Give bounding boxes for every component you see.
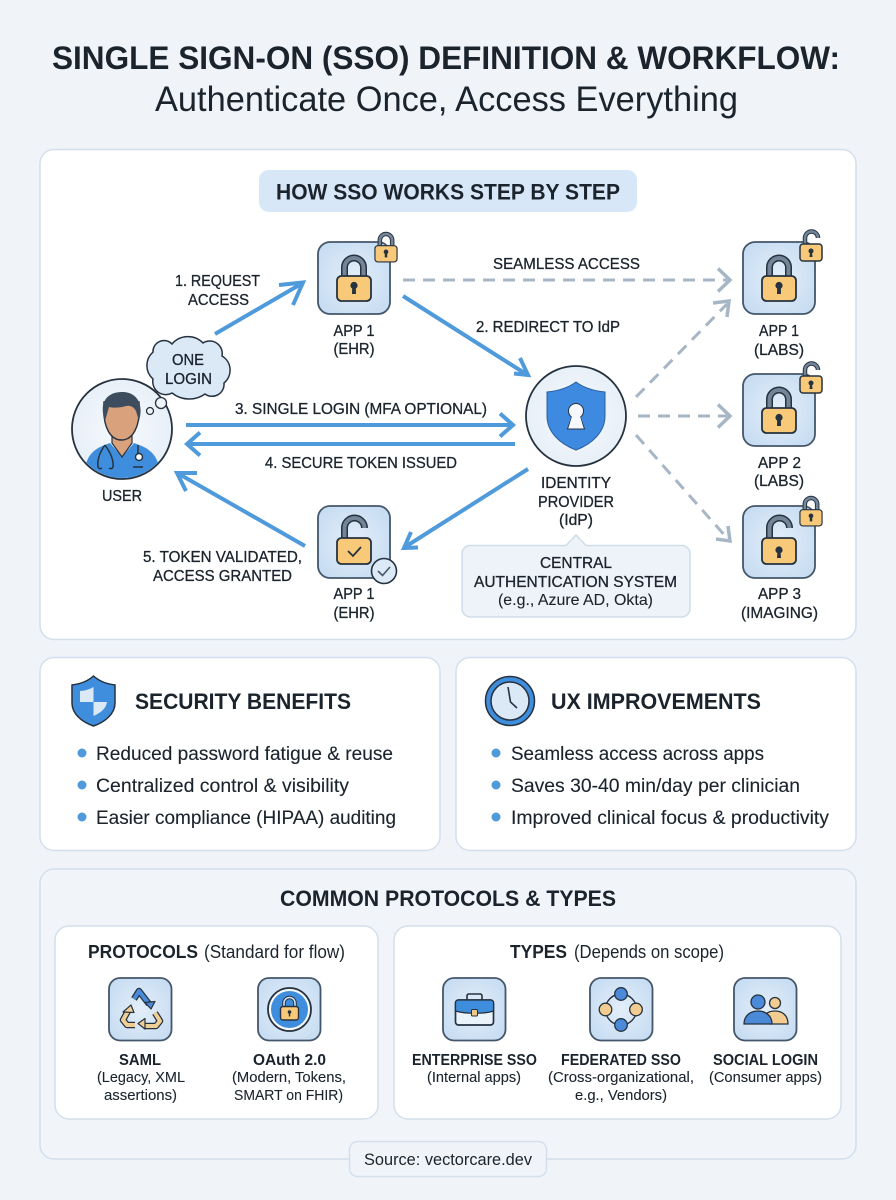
- tile: app 3 imaging: APP 3: [758, 586, 801, 603]
- tile: app 2 labs: (LABS): [754, 473, 804, 490]
- thought cloud: one login: [146, 337, 230, 414]
- thought cloud: one login: ONE: [172, 352, 204, 369]
- icon: clock: [486, 676, 534, 726]
- arrow: step 2 redirect: [403, 296, 528, 375]
- thought cloud: one login: LOGIN: [165, 371, 212, 388]
- label: user: USER: [102, 488, 142, 505]
- label: step 1: 1. REQUEST: [175, 273, 260, 290]
- tile: app 3 imaging: (IMAGING): [741, 605, 818, 622]
- label: identity provider: IDENTITY: [541, 475, 611, 492]
- tile: app 1 EHR (locked): (EHR): [334, 341, 374, 358]
- label: step 1: [175, 273, 260, 309]
- icon: briefcase: [443, 978, 506, 1040]
- icon: social login people: [734, 978, 796, 1040]
- tile: app 1 EHR (locked): [318, 234, 397, 358]
- tile: app 2 labs: [743, 364, 822, 490]
- label: OAuth 2.0: SMART on FHIR): [234, 1087, 343, 1104]
- tile: app 3 imaging: [741, 498, 822, 622]
- label: social login: [709, 1052, 822, 1086]
- tile: app 1 EHR (unlocked): [318, 506, 396, 622]
- label: SAML: SAML: [119, 1052, 161, 1069]
- arrow: step 1 request access: [215, 282, 303, 334]
- tile: app 1 labs: (LABS): [754, 342, 804, 359]
- sub-panel: types: [394, 926, 841, 1119]
- title: SINGLE SIGN-ON (SSO) DEFINITION & WORKFLOW:: [52, 40, 840, 76]
- list: UX improvements: [492, 744, 830, 829]
- heading: UX improvements: UX IMPROVEMENTS: [551, 689, 761, 714]
- arrow: step 4 token issued: [187, 432, 515, 456]
- label: step 5: 5. TOKEN VALIDATED,: [143, 549, 302, 566]
- icon: identity provider shield: [526, 366, 626, 466]
- label: enterprise SSO: [412, 1052, 537, 1086]
- tile: app 2 labs: APP 2: [758, 455, 801, 472]
- tile: app 1 labs: APP 1: [759, 323, 799, 340]
- label: step 1: ACCESS: [188, 292, 249, 309]
- icon: federated network: [590, 978, 652, 1040]
- panel: how SSO works: [40, 150, 856, 640]
- list: security benefits: Reduced password fatigue & reuse: [96, 744, 393, 765]
- callout: central authentication system: [462, 535, 690, 617]
- label: social login: (Consumer apps): [709, 1069, 822, 1086]
- heading: protocols: [88, 942, 345, 962]
- list: UX improvements: Improved clinical focus & productivity: [511, 808, 830, 829]
- tile: app 1 labs: [743, 232, 822, 359]
- panel: common protocols and types: [40, 869, 856, 1159]
- panel: security benefits: [40, 658, 440, 850]
- icon: OAuth lock: [258, 978, 320, 1040]
- label: enterprise SSO: (Internal apps): [427, 1069, 521, 1086]
- heading: protocols: (Standard for flow): [204, 942, 345, 962]
- label: SAML: [97, 1052, 185, 1104]
- sub-panel: protocols: [55, 926, 378, 1119]
- label: identity provider: (IdP): [559, 512, 593, 529]
- label: federated SSO: (Cross-organizational,: [548, 1069, 694, 1086]
- label: OAuth 2.0: [232, 1052, 346, 1104]
- callout: central authentication system: AUTHENTICATION SYSTEM: [474, 574, 677, 591]
- heading: security benefits: SECURITY BENEFITS: [135, 689, 351, 714]
- list: security benefits: [78, 744, 396, 829]
- label: step 4: 4. SECURE TOKEN ISSUED: [265, 455, 457, 472]
- label: step 3: 3. SINGLE LOGIN (MFA OPTIONAL): [235, 401, 487, 418]
- arrow: IdP to app 2 labs: [638, 404, 730, 428]
- heading: protocols: PROTOCOLS: [88, 942, 198, 962]
- icon: user clinician: [72, 379, 172, 482]
- panel: UX improvements: [456, 658, 856, 850]
- heading: how SSO works: [259, 170, 637, 212]
- arrow: IdP to app: [404, 469, 528, 548]
- source note: Source: vectorcare.dev: [364, 1150, 532, 1169]
- label: OAuth 2.0: (Modern, Tokens,: [232, 1069, 346, 1086]
- heading: how SSO works: HOW SSO WORKS STEP BY STEP: [276, 180, 620, 204]
- tile: app 1 EHR (unlocked): (EHR): [334, 605, 374, 622]
- callout: central authentication system: CENTRAL: [540, 555, 612, 572]
- label: federated SSO: e.g., Vendors): [575, 1087, 667, 1104]
- icon: SAML recycle arrows: [109, 978, 172, 1040]
- label: federated SSO: [548, 1052, 694, 1104]
- callout: central authentication system: (e.g., Azure AD, Okta): [498, 592, 653, 609]
- list: UX improvements: Seamless access across apps: [511, 744, 764, 765]
- arrow: IdP to app 1 labs: [636, 301, 729, 397]
- label: step 2: 2. REDIRECT TO IdP: [476, 319, 620, 336]
- arrow: IdP to app 3 imaging: [636, 435, 730, 541]
- tile: app 1 EHR (unlocked): APP 1: [334, 586, 375, 603]
- list: security benefits: Centralized control & visibility: [96, 776, 350, 797]
- label: identity provider: [538, 475, 614, 529]
- label: OAuth 2.0: OAuth 2.0: [253, 1052, 326, 1069]
- arrow: step 3 single login: [186, 414, 513, 436]
- label: identity provider: PROVIDER: [538, 494, 614, 511]
- title: Authenticate Once, Access Everything: [155, 80, 738, 119]
- icon: shield: [72, 676, 115, 726]
- title: [52, 40, 840, 119]
- label: federated SSO: FEDERATED SSO: [561, 1052, 681, 1069]
- list: UX improvements: Saves 30-40 min/day per clinician: [511, 776, 800, 797]
- arrow: seamless access: [403, 268, 730, 292]
- arrow: step 5 token validated: [177, 473, 305, 546]
- heading: types: [510, 942, 724, 962]
- label: step 5: [143, 549, 302, 585]
- heading: types: (Depends on scope): [574, 942, 724, 962]
- label: step 5: ACCESS GRANTED: [153, 568, 292, 585]
- label: SAML: (Legacy, XML: [97, 1069, 185, 1086]
- source note: [350, 1142, 546, 1176]
- label: SAML: assertions): [104, 1087, 177, 1104]
- list: security benefits: Easier compliance (HIPAA) auditing: [96, 808, 396, 829]
- label: social login: SOCIAL LOGIN: [713, 1052, 818, 1069]
- heading: common protocols and types: COMMON PROTOCOLS & TYPES: [280, 886, 616, 911]
- label: enterprise SSO: ENTERPRISE SSO: [412, 1052, 537, 1069]
- label: seamless access: SEAMLESS ACCESS: [493, 256, 640, 273]
- heading: types: TYPES: [510, 942, 567, 962]
- tile: app 1 EHR (locked): APP 1: [334, 323, 375, 340]
